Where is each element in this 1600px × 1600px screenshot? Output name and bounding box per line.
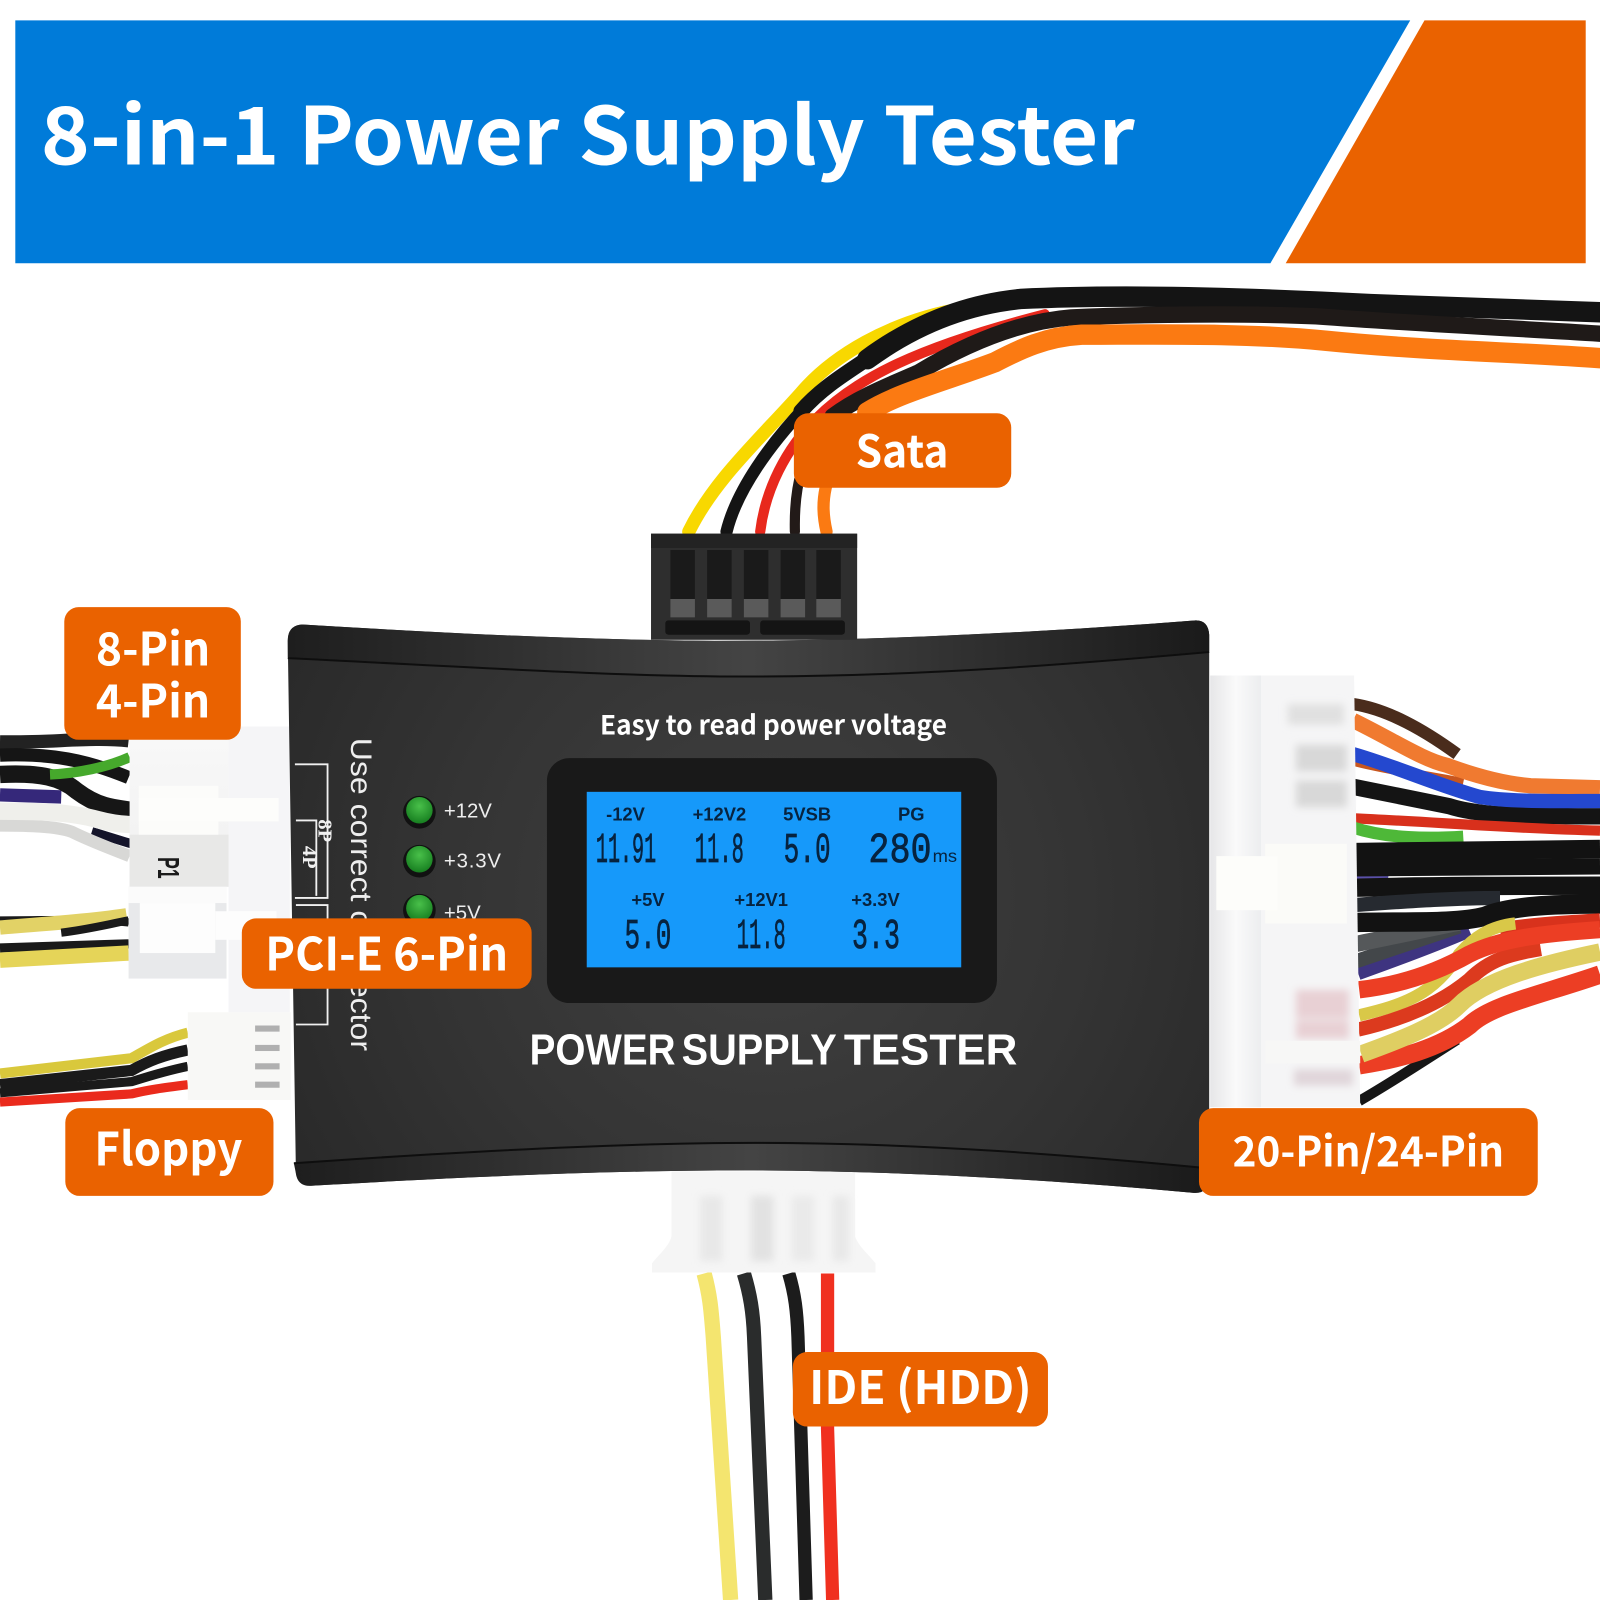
product name: TESTER: [844, 1025, 1017, 1074]
tester body: [288, 620, 1209, 1193]
LED: +3.3V: +3.3V: [444, 850, 501, 872]
connector brackets: [295, 764, 328, 1024]
reading: +3.3V: 3.3: [852, 912, 900, 961]
body top bevel: [288, 620, 1209, 676]
SATA cable bundle: [689, 297, 1600, 532]
label: 8-Pin 4-Pin: 4-Pin: [96, 665, 210, 731]
product name: [530, 1025, 1017, 1074]
LCD screen: 11.8: [695, 826, 744, 875]
LED: +12V: [403, 796, 492, 829]
display caption: Easy to read power voltage: [600, 704, 947, 743]
connector latch: [1216, 844, 1347, 923]
LCD screen: 11.91: [596, 826, 656, 875]
reading: +12V2: +12V2: [693, 803, 746, 824]
left connector: PCI-E 6-pin plug: [129, 887, 277, 979]
banner: orange corner: [1286, 20, 1586, 263]
reading: +5V: 5.0: [624, 912, 671, 961]
reading: 5VSB: 5.0: [784, 826, 831, 875]
label: Sata: Sata: [856, 415, 948, 480]
left connector: 8-pin/4-pin plug: [130, 740, 279, 887]
label: 20-Pin/24-Pin: [1199, 1108, 1538, 1196]
label: 20-Pin/24-Pin: 20-Pin/24-Pin: [1233, 1118, 1504, 1179]
label: Floppy: Floppy: [94, 1113, 242, 1179]
floppy cables: [0, 1033, 188, 1102]
label: Sata: [794, 413, 1011, 488]
product name: POWER: [530, 1025, 676, 1074]
label: 8-Pin 4-Pin: [64, 607, 241, 740]
right ATX connector: [1210, 676, 1360, 1107]
left connector: floppy plug: [188, 1012, 291, 1100]
reading: PG: PG: [898, 803, 924, 824]
body bottom bevel: [294, 1143, 1209, 1193]
title: 8-in-1 Power Supply Tester: [41, 72, 1135, 187]
reading: PG: [868, 803, 957, 875]
left connector: main housing: [229, 727, 290, 1012]
bracket label: 4P: 4P: [298, 846, 320, 869]
reading: +5V: [624, 889, 671, 961]
reading: -12V: -12V: [606, 803, 646, 824]
IDE connector housing: [652, 1171, 876, 1272]
reading: PG: 280: [868, 826, 932, 875]
ATX 20/24-pin cable bundle: [1353, 704, 1600, 1101]
reading: 5VSB: [783, 803, 831, 875]
label: 8-Pin 4-Pin: 8-Pin: [96, 613, 210, 679]
PCI-E 6-pin cables: [0, 915, 129, 960]
bracket label: 8P: 8P: [313, 819, 335, 842]
reading: -12V: [596, 803, 656, 875]
reading: +5V: +5V: [631, 889, 665, 910]
LED: +3.3V: [403, 845, 501, 878]
LED: +12V: +12V: [444, 800, 492, 822]
reading: +12V1: [734, 889, 788, 961]
label: IDE (HDD): IDE (HDD): [809, 1352, 1032, 1418]
LCD screen: [587, 792, 961, 967]
product name: SUPPLY: [682, 1025, 837, 1074]
LED: +5V: +5V: [444, 902, 481, 924]
reading: +12V2: [693, 803, 746, 875]
LED: +5V: [403, 894, 481, 927]
label: Floppy: [65, 1108, 273, 1196]
banner: blue background: [15, 20, 1410, 263]
LCD screen: 11.8: [737, 912, 786, 961]
side instruction text: Use correct connector: [344, 738, 377, 1051]
IDE cable wires: [704, 1273, 833, 1600]
reading: +3.3V: +3.3V: [851, 889, 901, 910]
label: PCI-E 6-Pin: PCI-E 6-Pin: [265, 918, 508, 984]
reading: +3.3V: [851, 889, 901, 961]
8-pin / 4-pin cables: [0, 739, 132, 856]
reading: PG: ms: [933, 846, 957, 866]
title banner: [15, 20, 1586, 263]
plug marking P1: P1: [151, 857, 185, 879]
reading: +12V1: +12V1: [734, 889, 788, 910]
SATA connector: [651, 534, 857, 640]
LCD bezel: [547, 758, 997, 1003]
reading: 5VSB: 5VSB: [783, 803, 831, 824]
